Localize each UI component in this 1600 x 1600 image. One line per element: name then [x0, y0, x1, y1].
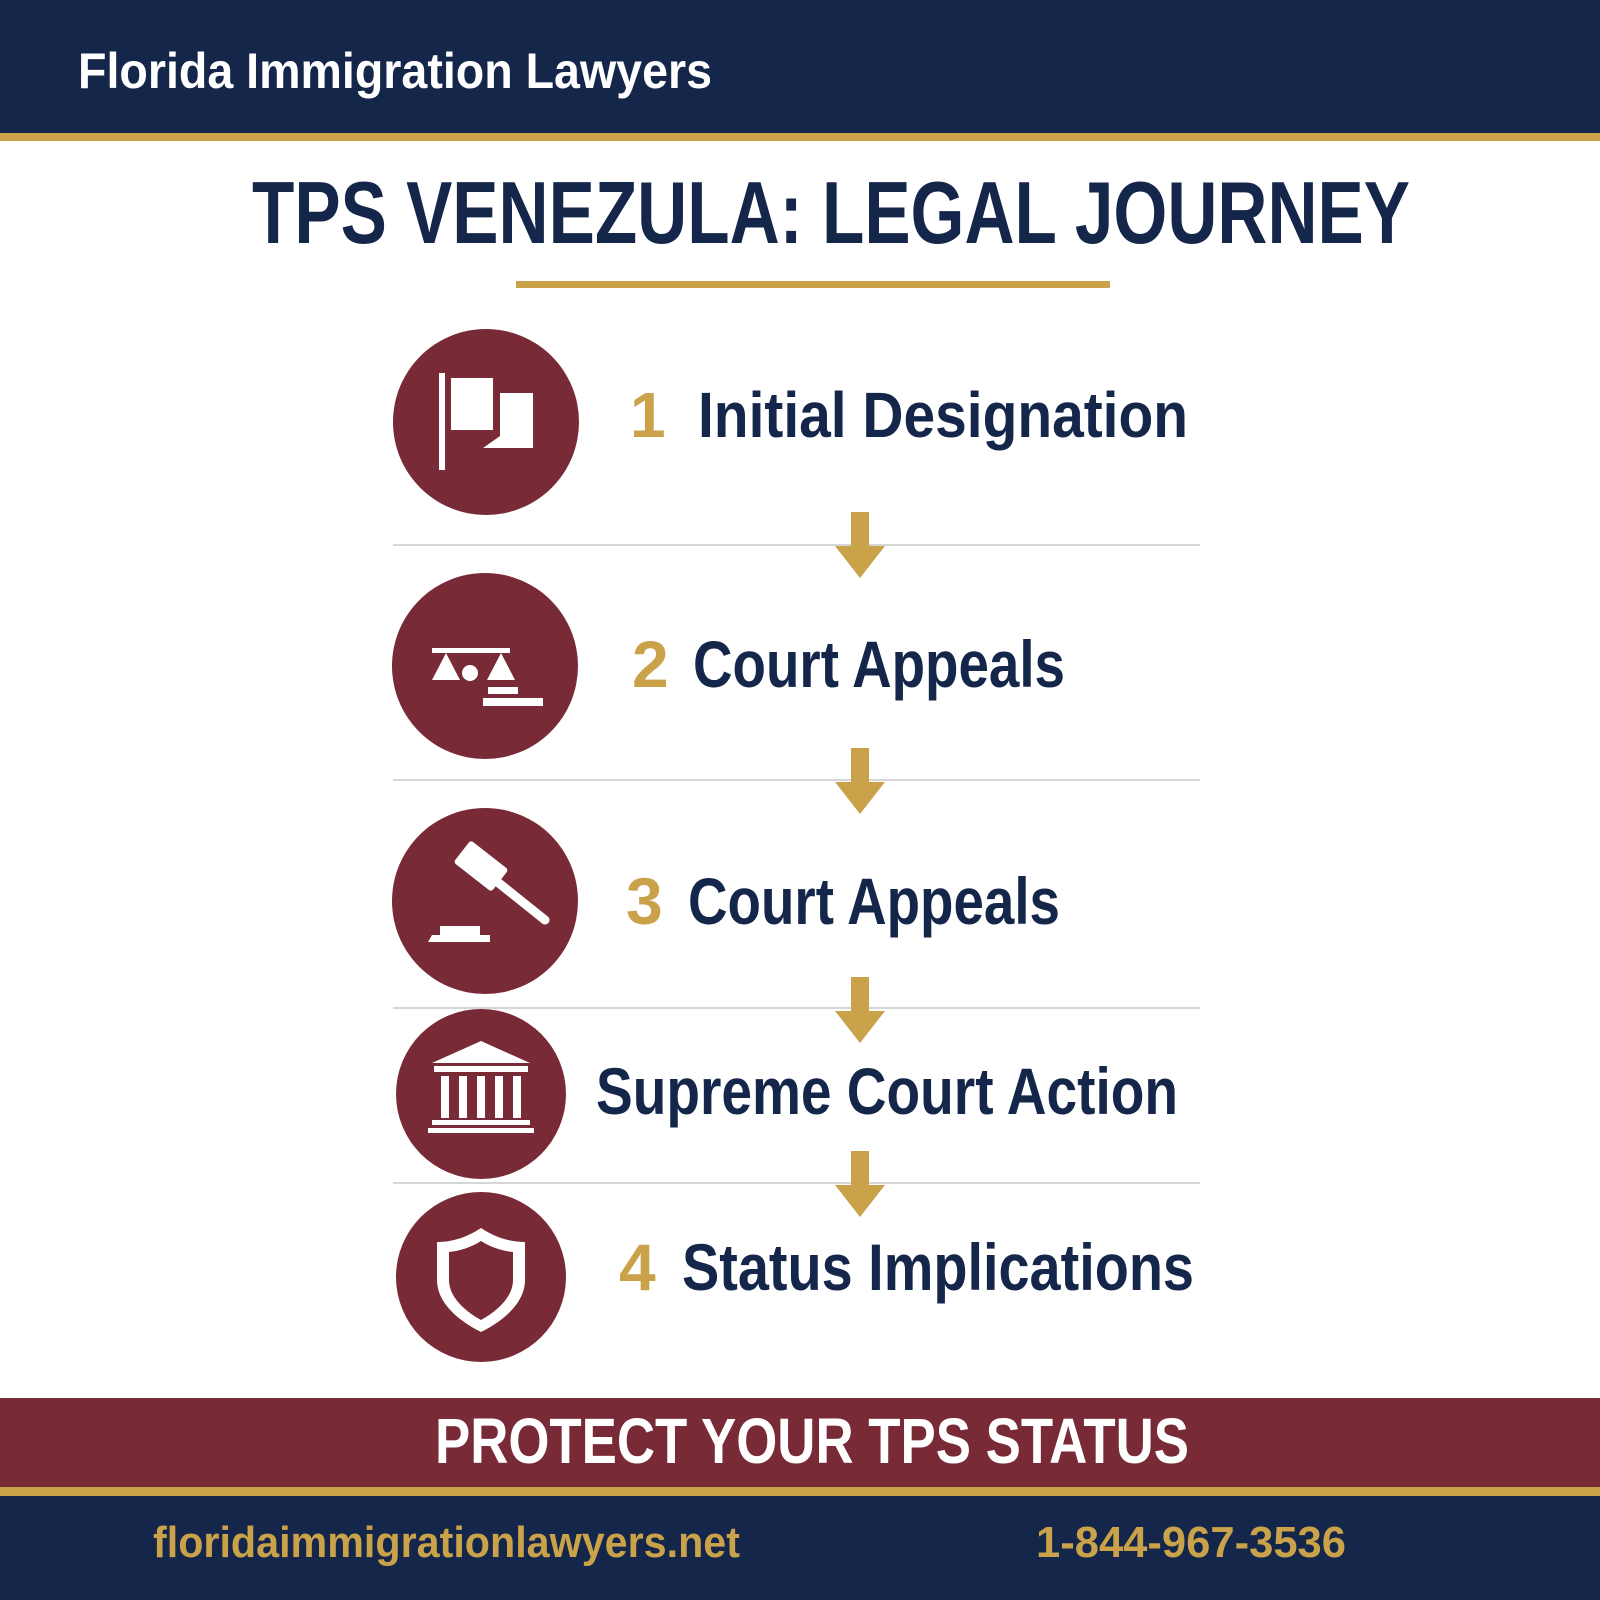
banner: protect your TPS status [0, 1398, 1600, 1487]
icon: courthouse [396, 1009, 566, 1179]
step 3: 3 [626, 864, 663, 938]
step 4 [396, 1009, 1178, 1179]
step 2: Court Appeals [693, 627, 1065, 701]
step 5: 4 [619, 1230, 656, 1304]
step 1: 1 [630, 379, 666, 451]
step 5 [396, 1192, 1194, 1362]
icon: gavel [392, 808, 578, 994]
icon: scales [392, 573, 578, 759]
step 1 [393, 329, 1188, 515]
header bar [0, 0, 1600, 141]
step 2: 2 [632, 627, 669, 701]
banner: protect your TPS status: PROTECT YOUR TPS STATUS [435, 1405, 1189, 1477]
step 5: Status Implications [682, 1230, 1194, 1304]
step 1: Initial Designation [698, 379, 1188, 451]
footer contact: 1-844-967-3536 [1036, 1518, 1346, 1567]
icon: flag [393, 329, 579, 515]
step 3: Court Appeals [688, 864, 1060, 938]
header brand text: Florida Immigration Lawyers [78, 43, 712, 99]
step 3 [392, 808, 1060, 994]
footer contact: floridaimmigrationlawyers.net [153, 1518, 740, 1567]
arrows [835, 512, 885, 1217]
step 4: Supreme Court Action [596, 1054, 1178, 1128]
icon: shield [396, 1192, 566, 1362]
title underline [516, 281, 1110, 288]
footer contact [0, 1496, 1600, 1600]
step 2 [392, 573, 1065, 759]
